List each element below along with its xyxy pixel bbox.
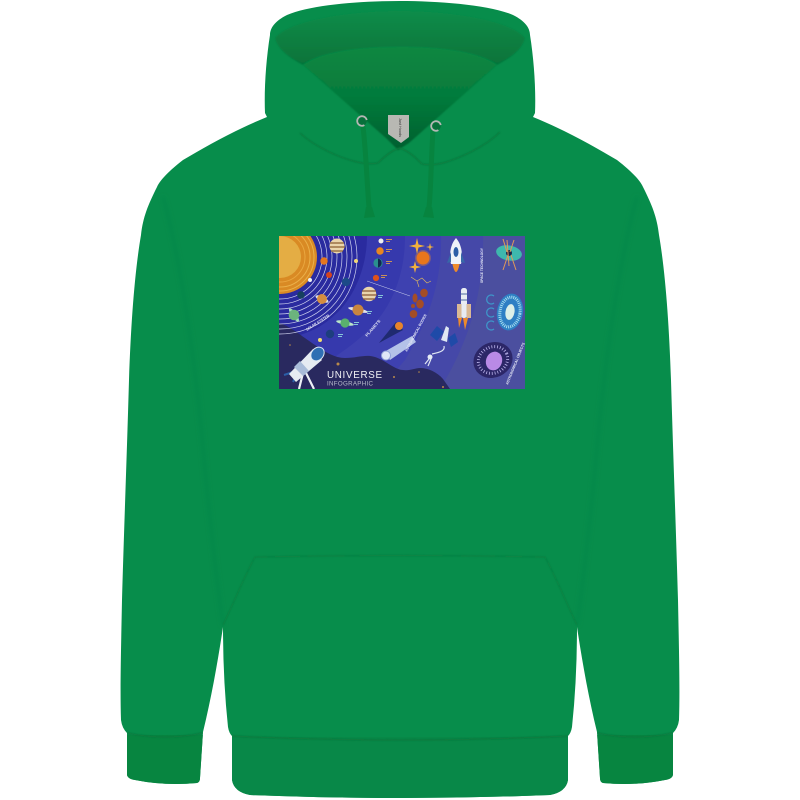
hoodie [121,1,680,800]
hood interior [303,47,497,150]
hood seam shading [300,132,500,165]
label: astronomical bodies: ASTRONOMICAL BODIES [404,313,428,352]
hem shading [232,780,568,798]
astronomical bodies [409,238,434,318]
sleeve cuffs [127,733,673,737]
astronaut [425,346,444,366]
dark hill footer [279,323,450,389]
rocket two [457,288,471,330]
planets column [318,238,410,342]
title: INFOGRAPHIC [327,380,374,388]
astronomical objects [474,238,524,378]
label: solar system: SOLAR SYSTEM [305,313,330,332]
legend text bars [381,239,392,278]
eyelet left [355,114,369,128]
sun [279,236,317,294]
drawcord left [363,127,375,218]
label: space technology: SPACE TECHNOLOGY [480,248,484,283]
label: planets: PLANETS [364,318,382,338]
eyelet right [429,119,443,133]
small ring icons [487,295,494,330]
orbits [279,236,358,334]
spiral galaxy [496,294,524,330]
front pocket [226,555,572,618]
rocket one [447,238,465,272]
space technology [425,238,471,366]
black hole disc [495,239,523,270]
telescope [284,344,327,389]
label: astronomical objects: ASTRONOMICAL OBJECTS [505,342,526,385]
hood lower overlap [378,148,422,164]
bottom hem [232,736,568,740]
title: UNIVERSE [327,370,382,381]
legend text bars blue [338,295,383,337]
title [328,371,382,386]
sleeve seam shading [163,197,637,625]
panel background bands [279,236,525,389]
hoodie body silhouette [121,1,679,798]
comets [379,322,416,360]
elliptical galaxy [474,342,512,378]
stars on hill [289,344,444,388]
hood back interior [276,28,524,65]
drawcord right [423,130,434,218]
planets [287,238,358,323]
solar system [279,236,358,334]
neck label: Just Hoods [398,118,402,137]
satellite [430,326,458,347]
panel: universe infographic print [279,236,525,389]
neck label [388,115,409,143]
cuff shading [127,735,673,784]
